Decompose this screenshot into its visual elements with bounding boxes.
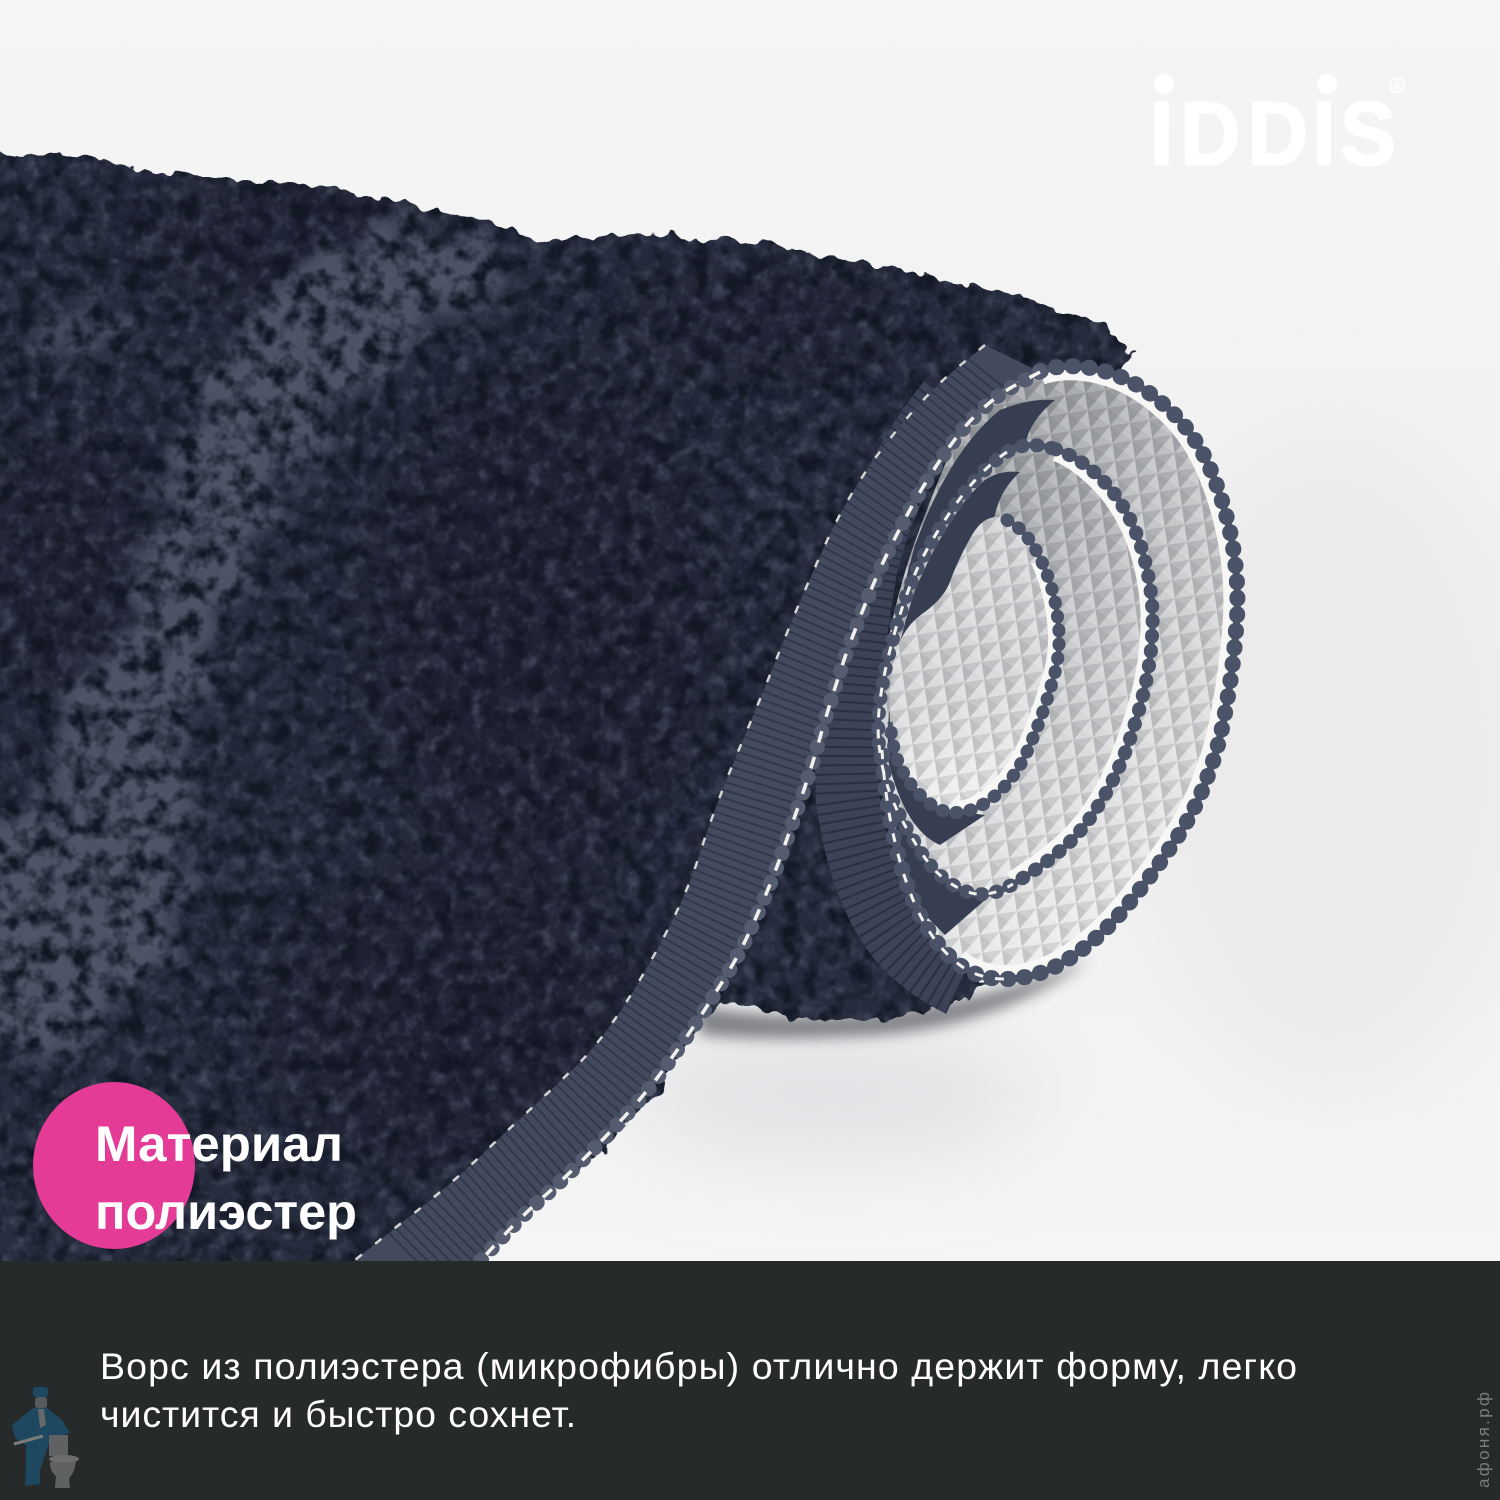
- logo: IDDIS: R: [1394, 81, 1402, 92]
- heading: Материал полиэстер: [95, 1116, 357, 1240]
- pink circle: [33, 1082, 195, 1249]
- beaded edges: [878, 366, 1237, 979]
- rolled bath mat photo: [0, 130, 1237, 1270]
- heading: Материал полиэстер: полиэстер: [95, 1184, 357, 1240]
- heading: Материал полиэстер: Материал: [95, 1116, 343, 1172]
- description text: [100, 1345, 1297, 1435]
- dark fold behind middle ring: [885, 400, 1055, 935]
- icon: plumber with toilet: [12, 1387, 79, 1488]
- description text: чистится и быстро сохнет.: [100, 1393, 576, 1435]
- white stitches: [350, 345, 1040, 1264]
- inner backing ring: [890, 517, 1059, 813]
- logo: IDDIS: IDDIS: [1150, 84, 1396, 184]
- middle backing ring: [878, 445, 1153, 894]
- outer edge beads: [478, 372, 1040, 1264]
- lower ridged binding: [847, 400, 960, 985]
- main binding band: [350, 345, 1040, 1264]
- soft background shading: [620, 430, 1500, 1150]
- description text: Ворс из полиэстера (микрофибры) отлично держит форму, легко: [100, 1345, 1297, 1387]
- watermark: афоня.рф: афоня.рф: [1474, 1392, 1493, 1488]
- mat pile: [0, 130, 1200, 1270]
- dark fold behind inner ring: [888, 472, 1020, 845]
- floor shadow: [695, 960, 1090, 1038]
- bottom bar: [0, 1261, 1500, 1500]
- outer backing ring: [882, 366, 1237, 979]
